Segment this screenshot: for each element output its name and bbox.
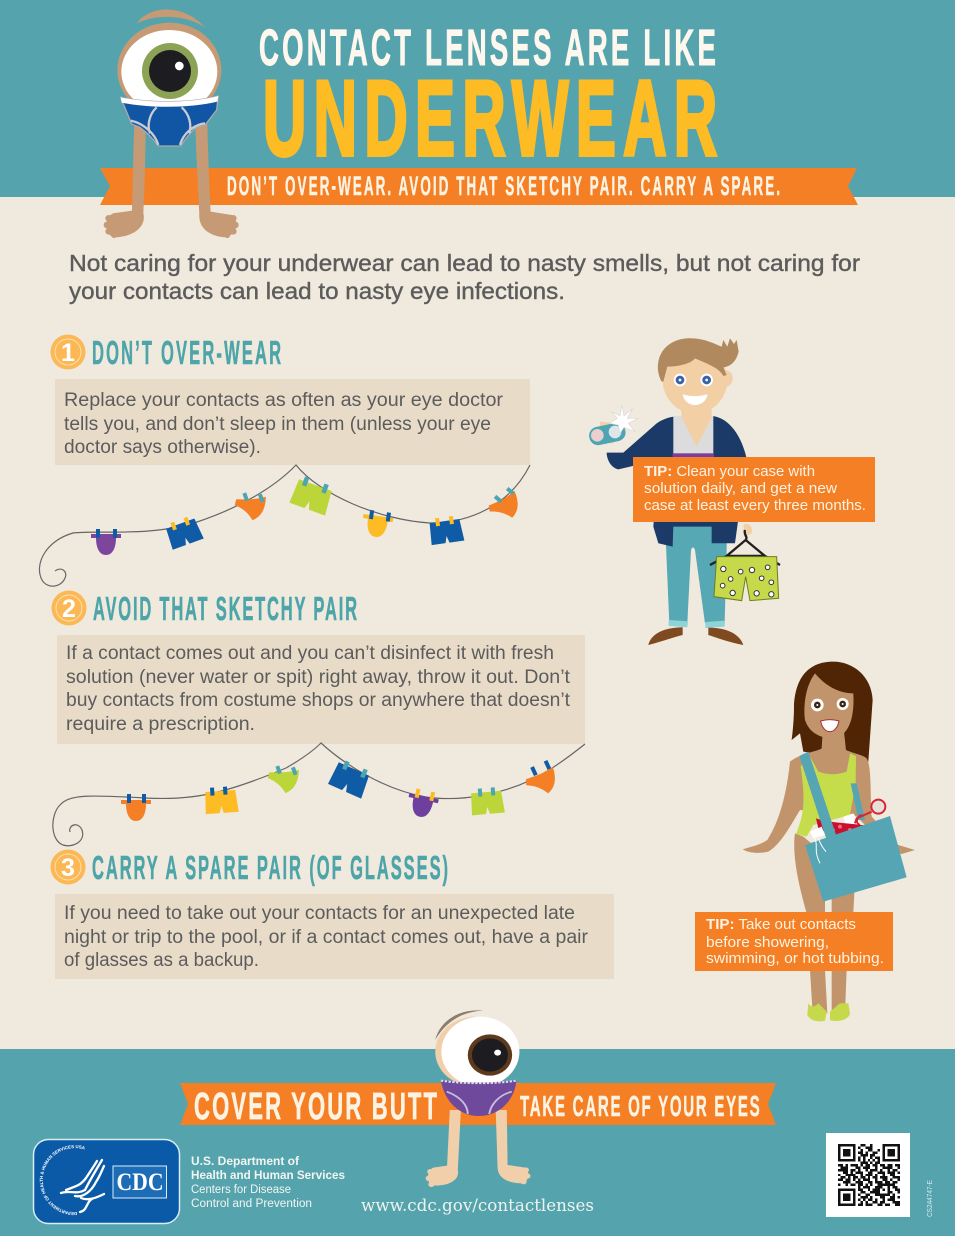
department text — [191, 1156, 345, 1210]
tip box: take out contacts — [695, 912, 893, 971]
tip box: clean your case: case at least every three months. — [644, 497, 866, 514]
step 2 text panel — [57, 635, 585, 744]
step 3 heading: CARRY A SPARE PAIR (OF GLASSES) — [92, 849, 448, 887]
step 3 text panel: night or trip to the pool, or if a contact comes out, have a pair — [64, 927, 589, 948]
take care of your eyes: TAKE CARE OF YOUR EYES — [520, 1090, 760, 1122]
CDC HHS logo — [32, 1138, 180, 1224]
clothesline 2 — [53, 743, 585, 846]
step 1 number badge: 1 — [61, 339, 75, 367]
title: underwear: UNDERWEAR — [263, 60, 717, 178]
header band — [0, 0, 955, 197]
QR code — [826, 1133, 910, 1217]
tip box: clean your case: TIP: Clean your case with — [644, 463, 815, 480]
step 1 text panel: tells you, and don’t sleep in them (unless your eye — [64, 414, 491, 435]
step 2 text panel: solution (never water or spit) right away, throw it out. Don’t — [66, 667, 571, 688]
intro text: your contacts can lead to nasty eye infections. — [69, 278, 565, 304]
step 2 text panel: require a prescription. — [66, 714, 255, 735]
step 3 number badge — [50, 850, 86, 884]
tip box: clean your case — [633, 457, 875, 522]
step 2 heading: AVOID THAT SKETCHY PAIR — [93, 590, 357, 628]
intro text: Not caring for your underwear can lead to nasty smells, but not caring for — [69, 250, 860, 276]
step 2 text panel: buy contacts from costume shops or anywhere that doesn’t — [66, 690, 571, 711]
eye mascot with purple briefs — [426, 1010, 531, 1187]
step 1 text panel: Replace your contacts as often as your eye doctor — [64, 390, 504, 411]
website url: www.cdc.gov/contactlenses — [361, 1196, 594, 1216]
department text: Control and Prevention — [191, 1198, 312, 1210]
publication code: CS244747-E — [927, 1180, 934, 1217]
step 3 number badge: 3 — [61, 854, 75, 882]
cover your butt: COVER YOUR BUTT — [194, 1085, 437, 1128]
CDC HHS logo: DEPARTMENT OF HEALTH & HUMAN SERVICES USA — [40, 1145, 84, 1216]
department text: U.S. Department of — [191, 1156, 299, 1168]
intro text — [69, 250, 860, 304]
tip box: clean your case: solution daily, and get a new — [644, 480, 837, 497]
department text: Centers for Disease — [191, 1184, 291, 1196]
header ribbon — [100, 168, 858, 205]
tip box: take out contacts: swimming, or hot tubbing. — [706, 950, 884, 967]
footer band — [0, 1049, 955, 1236]
title: contact lenses are like: CONTACT LENSES ARE LIKE — [259, 19, 716, 76]
step 2 number badge — [52, 590, 86, 626]
tip box: take out contacts: before showering, — [706, 934, 829, 951]
clothesline 1 — [39, 465, 530, 586]
woman with beach bag — [743, 662, 915, 1021]
step 1 number badge — [50, 334, 86, 370]
man with lens case and boxers — [588, 338, 780, 645]
eye mascot with blue briefs — [104, 9, 239, 238]
step 1 text panel — [55, 379, 530, 465]
step 1 heading: DON’T OVER-WEAR — [92, 334, 281, 372]
step 3 text panel: If you need to take out your contacts for an unexpected late — [64, 903, 575, 924]
step 2 text panel: If a contact comes out and you can’t disinfect it with fresh — [66, 643, 554, 664]
step 1 text panel: doctor says otherwise). — [64, 437, 261, 458]
department text: Health and Human Services — [191, 1170, 345, 1182]
step 3 text panel: of glasses as a backup. — [64, 950, 259, 971]
footer ribbon — [180, 1083, 776, 1125]
step 3 text panel — [55, 894, 614, 979]
tip box: take out contacts: TIP: Take out contacts — [706, 916, 856, 933]
CDC HHS logo: CDC — [116, 1169, 164, 1196]
step 2 number badge: 2 — [62, 595, 76, 623]
ribbon tagline: DON’T OVER-WEAR. AVOID THAT SKETCHY PAIR. CARRY A SPARE. — [227, 171, 780, 201]
